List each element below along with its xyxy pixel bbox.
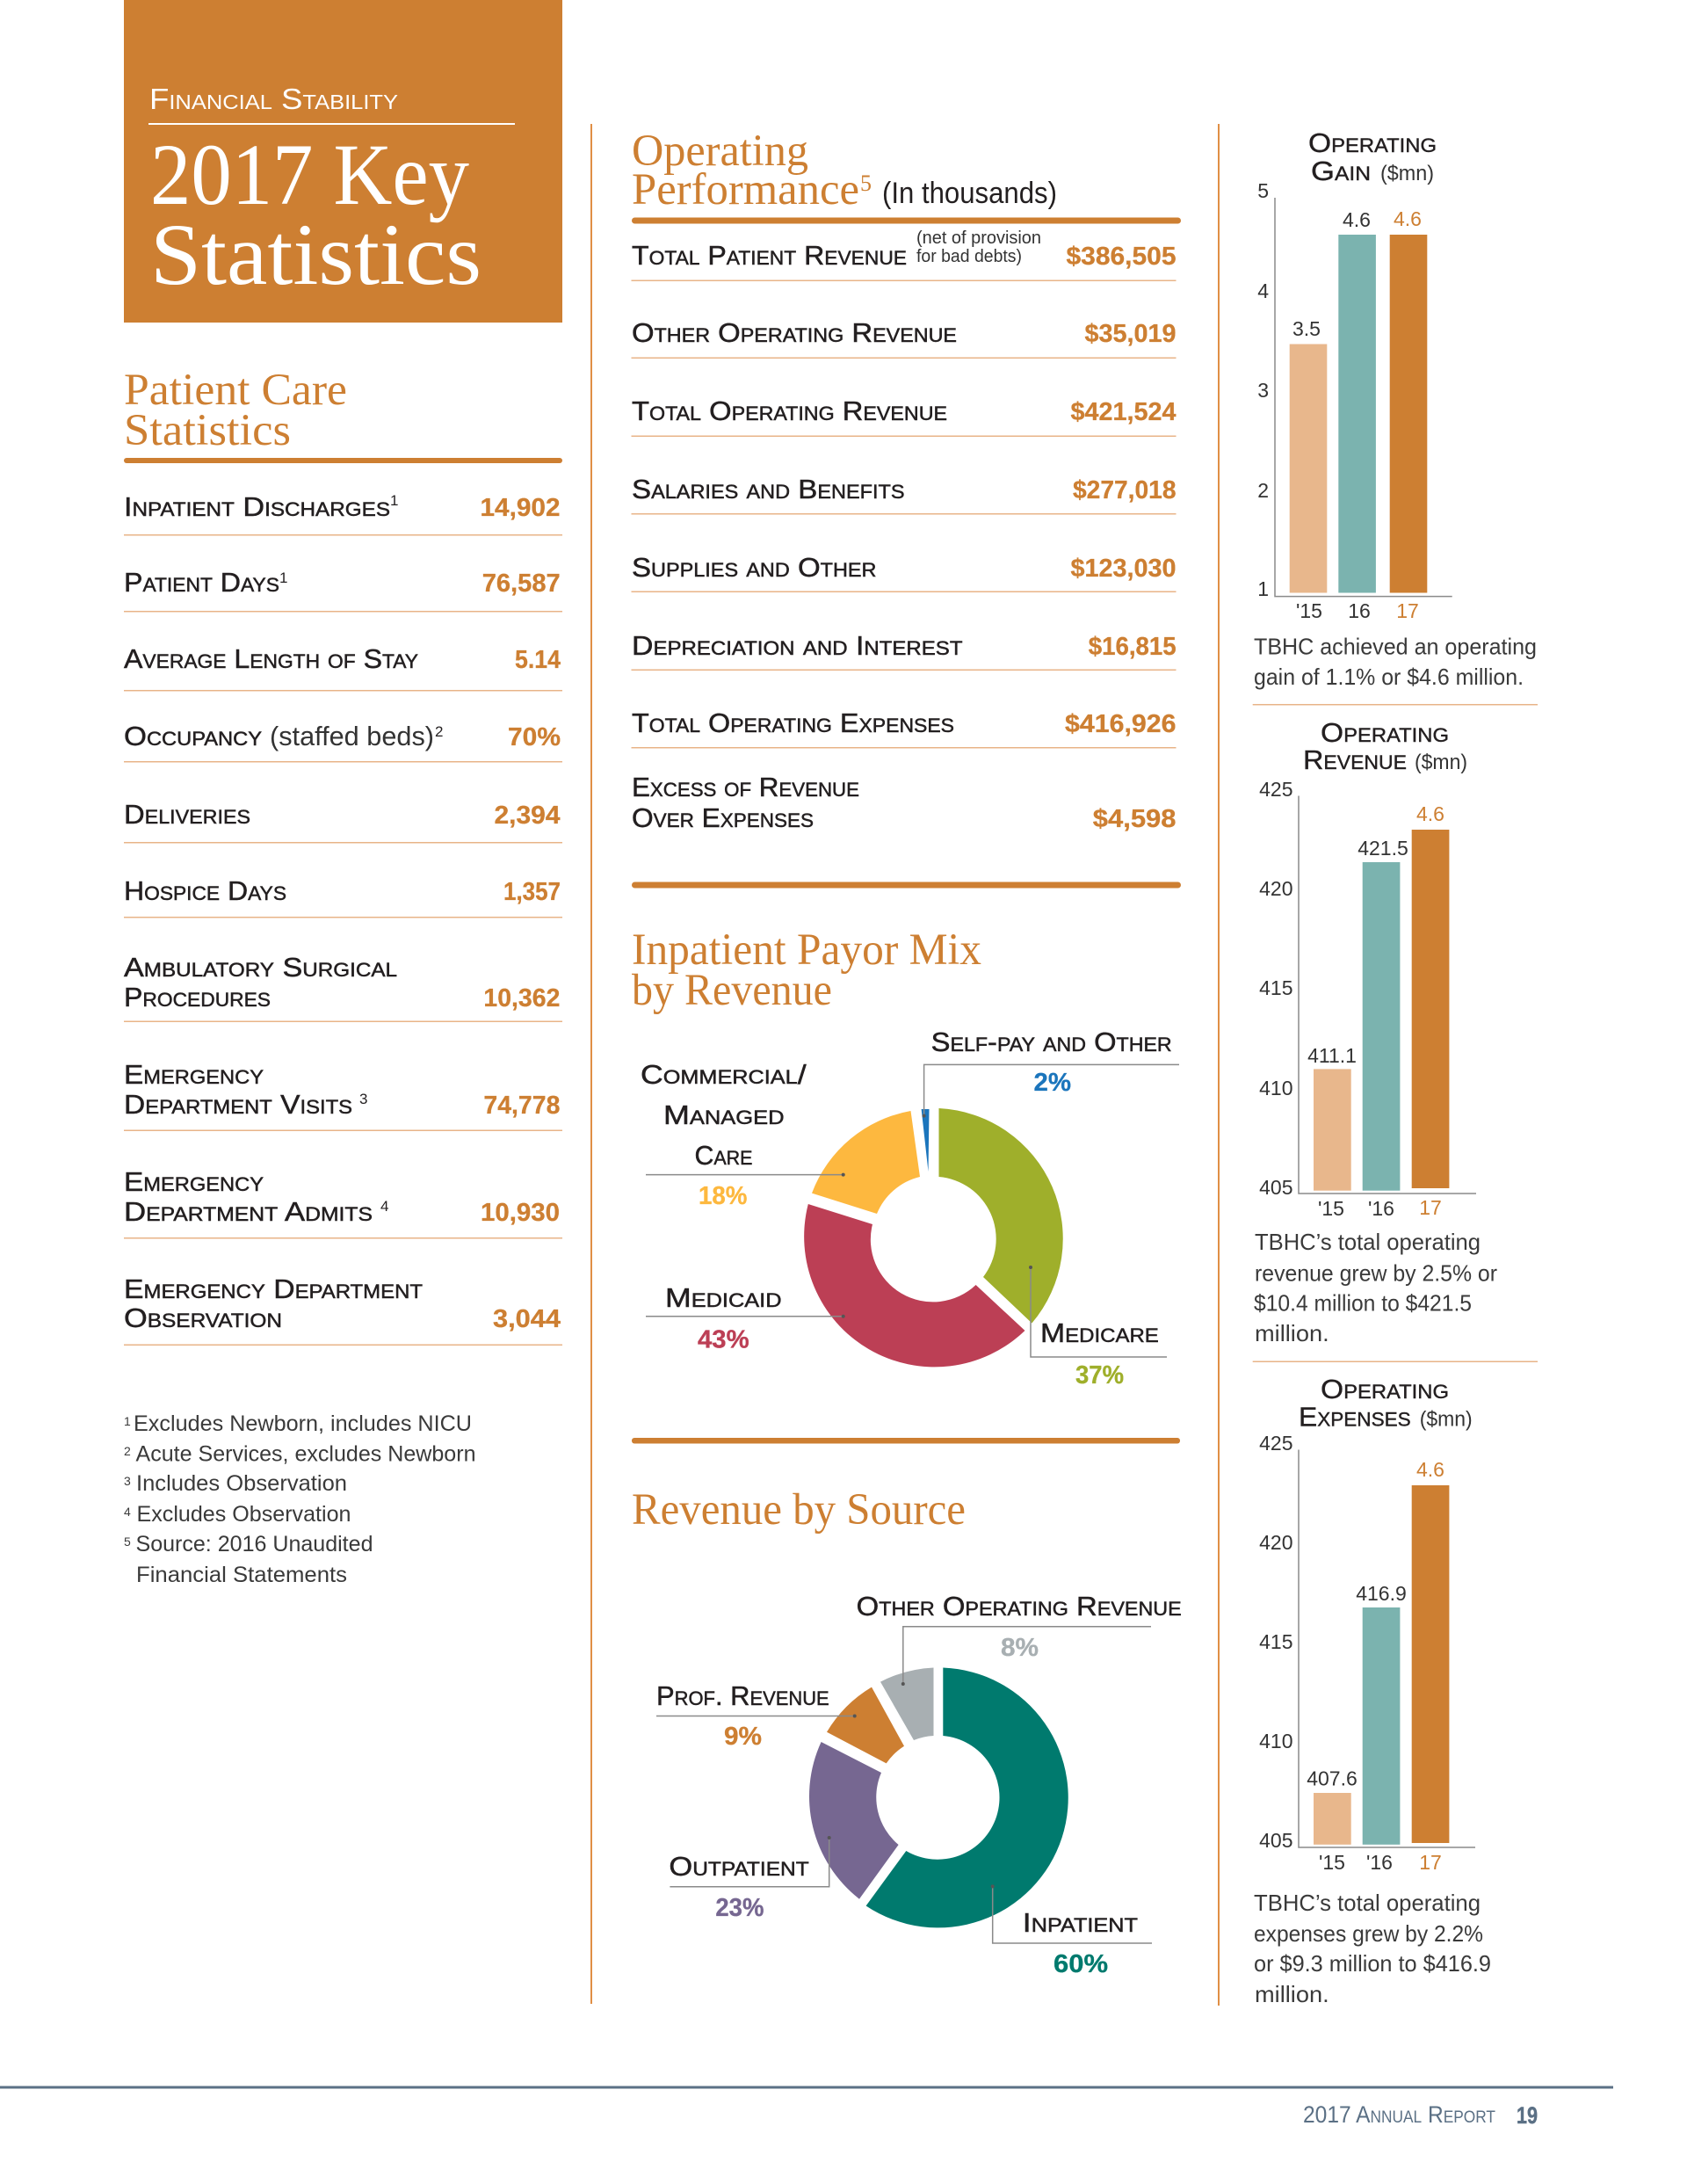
bar chart: Operating Expenses: 420 (1259, 1531, 1293, 1554)
callout: Prof. Revenue: Prof. Revenue (656, 1680, 829, 1711)
panel: Operating Revenue chart (1253, 717, 1538, 1362)
row: Ambulatory Surgical Procedures: 10,362 (483, 984, 560, 1012)
bar chart: Operating Revenue: 411.1 (1307, 1044, 1357, 1067)
chart title: Operating Revenue: Operating (1321, 717, 1449, 748)
panel: Patient Care Statistics (124, 366, 562, 1587)
bar chart: Operating Gain: 3 (1257, 379, 1269, 402)
heading: Inpatient Payor Mix (632, 925, 981, 1015)
row: Hospice Days: 1,357 (503, 878, 561, 906)
row: Emergency Department Observation: Emergency Department (124, 1273, 423, 1304)
callout: Medicare: 37% (1075, 1361, 1124, 1389)
row: Inpatient Discharges (124, 491, 562, 536)
caption: operating expenses: or $9.3 million to $416.9 (1254, 1950, 1491, 1977)
row: Emergency Department Visits: Emergency (124, 1059, 264, 1090)
bar chart: Operating Gain: 4.6 (1343, 208, 1371, 231)
bar chart: Operating Gain: 3.5 (1292, 317, 1321, 340)
footnotes: Financial Statements (136, 1563, 347, 1587)
row: Total Patient Revenue: (net of provision (916, 229, 1041, 248)
chart title: Operating Revenue: Revenue (1303, 744, 1407, 775)
footnotes: 1 (124, 1414, 131, 1428)
callout: Other Operating Revenue: 8% (1001, 1634, 1039, 1662)
row: Total Operating Expenses: $416,926 (1065, 710, 1176, 738)
eyebrow: Financial Stability: Financial Stability (149, 83, 398, 115)
bar chart: Operating Gain (1257, 179, 1452, 622)
heading: Operating Performance: 5 (860, 171, 872, 196)
donut chart: revenue sources (809, 1668, 1068, 1927)
callout: Outpatient (669, 1836, 831, 1922)
row: Other Operating Revenue (631, 317, 1176, 359)
callout: Prof. Revenue (656, 1680, 857, 1751)
row: Occupancy: (staffed beds) (270, 721, 434, 751)
row: Average Length of Stay (124, 643, 562, 691)
donut chart: payor mix (804, 1108, 1063, 1367)
row: Supplies and Other: $123,030 (1070, 555, 1176, 583)
main title: Statistics (150, 206, 481, 303)
bar chart: Operating Revenue: 410 (1259, 1077, 1293, 1099)
title panel: 2017 Key Statistics (124, 0, 562, 323)
row: Patient Days: Patient Days (124, 567, 279, 598)
footer: annual report and page number: 19 (1517, 2102, 1538, 2129)
row: Ambulatory Surgical Procedures: Ambulatory Surgical (124, 952, 397, 983)
callout: Medicaid: 43% (698, 1326, 749, 1354)
callout: Self-pay and Other (923, 1027, 1179, 1118)
row: Emergency Department Observation: Observation (124, 1302, 282, 1333)
callout: Commercial / Managed Care: Care (694, 1140, 752, 1171)
bar chart: Operating Revenue: '16 (1368, 1197, 1394, 1220)
row: Occupancy: 70% (508, 723, 561, 751)
callout: Medicaid: Medicaid (665, 1282, 782, 1313)
footnotes: Source: 2016 Unaudited (135, 1532, 373, 1556)
caption: operating gain: gain of 1.1% or $4.6 million. (1254, 664, 1524, 690)
row: Salaries and Benefits: Salaries and Benefits (632, 474, 905, 504)
row: Total Patient Revenue: for bad debts) (916, 247, 1022, 266)
panel: Operating Performance (631, 127, 1181, 888)
footnotes: 2 (124, 1444, 131, 1458)
panel: Inpatient Payor Mix by Revenue (632, 925, 1180, 1443)
footnotes: 3 (124, 1474, 131, 1488)
row: Occupancy: 2 (435, 723, 443, 740)
chart title: Operating Expenses: ($mn) (1420, 1408, 1473, 1432)
bar chart: Operating Expenses (1259, 1432, 1475, 1874)
chart title: Operating Expenses (1299, 1374, 1473, 1433)
chart title: Operating Gain: Operating (1308, 127, 1437, 158)
bar chart: Operating Expenses: 405 (1259, 1829, 1293, 1852)
row: Average Length of Stay: 5.14 (515, 646, 561, 674)
chart title: Operating Gain: Gain (1311, 156, 1371, 186)
callout: Medicare (1029, 1266, 1167, 1389)
bar chart: Operating Expenses: '16 (1366, 1851, 1393, 1874)
bar chart: Operating Gain: 17 (1396, 599, 1419, 622)
caption: operating gain (1254, 633, 1537, 690)
row: Excess of Revenue Over Expenses (632, 772, 1176, 833)
row: Emergency Department Visits (124, 1059, 562, 1131)
row: Average Length of Stay: Average Length of Stay (124, 643, 418, 674)
row: Emergency Department Visits: Department Visits (124, 1089, 352, 1120)
main title (150, 126, 481, 303)
row: Inpatient Discharges: Inpatient Discharges (124, 491, 390, 522)
chart title: Operating Revenue: ($mn) (1415, 751, 1467, 774)
row: Emergency Department Admits: 4 (380, 1198, 388, 1215)
callout: Commercial / Managed Care (641, 1059, 845, 1210)
callout: Prof. Revenue: 9% (724, 1723, 762, 1751)
panel: Operating Expenses chart (1254, 1374, 1491, 2007)
row: Emergency Department Observation (124, 1273, 562, 1346)
callout: Outpatient: Outpatient (669, 1851, 809, 1882)
callout: Other Operating Revenue (857, 1591, 1182, 1686)
row: Occupancy: Occupancy (124, 721, 262, 751)
row: Salaries and Benefits (631, 474, 1176, 515)
bar chart: Operating Revenue: 405 (1259, 1176, 1293, 1199)
callout: Self-pay and Other: Self-pay and Other (931, 1027, 1172, 1057)
row: Other Operating Revenue: $35,019 (1084, 320, 1176, 348)
caption: operating revenue: TBHC’s total operating (1255, 1229, 1481, 1255)
bar chart: Operating Revenue: 420 (1259, 877, 1293, 900)
caption: operating gain: TBHC achieved an operating (1254, 633, 1537, 659)
bar chart: Operating Expenses: 425 (1259, 1432, 1293, 1455)
caption: operating revenue: million. (1255, 1320, 1329, 1346)
row: Ambulatory Surgical Procedures (124, 952, 562, 1022)
chart title: Operating Gain: ($mn) (1380, 162, 1434, 185)
row: Total Patient Revenue: Total Patient Revenue (632, 240, 907, 271)
footnotes: 5 (124, 1535, 131, 1549)
row: Patient Days (124, 567, 562, 612)
row: Supplies and Other: Supplies and Other (632, 552, 877, 583)
callout: Commercial / Managed Care: 18% (699, 1182, 748, 1210)
caption: operating expenses: expenses grew by 2.2% (1254, 1920, 1483, 1947)
callout: Commercial / Managed Care: Managed (663, 1099, 784, 1130)
bar chart: Operating Revenue: 421.5 (1358, 837, 1408, 860)
bar chart: Operating Expenses: '15 (1319, 1851, 1345, 1874)
caption: operating revenue: $10.4 million to $421.5 (1254, 1290, 1472, 1317)
row: Hospice Days (124, 875, 562, 918)
row: Ambulatory Surgical Procedures: Procedures (124, 982, 271, 1012)
row: Total Operating Revenue: Total Operating Revenue (632, 395, 947, 426)
row: Hospice Days: Hospice Days (124, 875, 286, 906)
callout: Self-pay and Other: 2% (1033, 1069, 1071, 1097)
panel: Operating Gain chart (1253, 127, 1538, 705)
row: Total Operating Revenue: $421,524 (1070, 398, 1176, 426)
heading: Patient Care Statistics (124, 366, 562, 463)
callout: Inpatient: 60% (1053, 1950, 1108, 1978)
row: Emergency Department Visits: 3 (359, 1091, 367, 1107)
callout: Other Operating Revenue: Other Operating Revenue (857, 1591, 1182, 1622)
bar chart: Operating Gain: '15 (1296, 599, 1322, 622)
bar chart: Operating Gain: 4 (1257, 279, 1269, 302)
bar chart: Operating Gain: 1 (1257, 577, 1269, 600)
footer: annual report and page number: 2017 Annual Report (1303, 2101, 1495, 2128)
bar chart: Operating Revenue (1259, 778, 1476, 1220)
row: Total Operating Revenue (631, 395, 1176, 437)
callout: Commercial / Managed Care: Commercial/ (641, 1059, 807, 1090)
row: Excess of Revenue Over Expenses: Excess of Revenue (632, 772, 859, 802)
heading: Revenue by Source: Revenue by Source (632, 1485, 966, 1535)
heading: Inpatient Payor Mix: Inpatient Payor Mix (632, 925, 981, 975)
row: Emergency Department Admits: Department Admits (124, 1196, 373, 1227)
bar chart: Operating Gain: 4.6 (1394, 207, 1422, 230)
chart title: Operating Expenses: Expenses (1299, 1402, 1411, 1433)
row: Total Patient Revenue (631, 229, 1176, 281)
bar chart: Operating Revenue: '15 (1318, 1197, 1344, 1220)
footnotes (124, 1411, 476, 1587)
footnotes: Excludes Newborn, includes NICU (134, 1411, 472, 1436)
row: Excess of Revenue Over Expenses: Over Expenses (632, 802, 814, 833)
heading: Patient Care Statistics: Patient Care (124, 366, 347, 415)
row: Emergency Department Admits (124, 1166, 562, 1239)
footer: annual report and page number (0, 2086, 1613, 2129)
row: Patient Days: 1 (279, 570, 287, 586)
bar chart: Operating Revenue: 425 (1259, 778, 1293, 801)
bar chart: Operating Gain: 16 (1348, 599, 1371, 622)
chart title: Operating Expenses: Operating (1321, 1374, 1449, 1404)
caption: operating revenue (1254, 1229, 1497, 1346)
caption: operating expenses: million. (1255, 1981, 1329, 2007)
row: Emergency Department Visits: 74,778 (483, 1092, 560, 1120)
callout: Outpatient: 23% (715, 1894, 764, 1922)
row: Emergency Department Admits: Emergency (124, 1166, 264, 1197)
row: Inpatient Discharges: 14,902 (480, 494, 561, 522)
panel: Revenue by Source (632, 1485, 1182, 1978)
bar chart: Operating Expenses: 415 (1259, 1630, 1293, 1653)
bar chart: Operating Expenses: 17 (1419, 1851, 1442, 1874)
caption: operating expenses (1254, 1890, 1491, 2007)
heading: Operating Performance (632, 127, 1181, 223)
bar chart: Operating Revenue: 17 (1419, 1196, 1442, 1219)
bar chart: Operating Expenses: 407.6 (1307, 1767, 1358, 1790)
caption: operating revenue: revenue grew by 2.5% or (1255, 1260, 1497, 1287)
footnotes: 4 (124, 1505, 131, 1519)
heading: Inpatient Payor Mix: by Revenue (632, 966, 832, 1015)
row: Deliveries (124, 799, 562, 844)
bar chart: Operating Expenses: 410 (1259, 1730, 1293, 1752)
chart title: Operating Gain (1308, 127, 1437, 186)
callout: Inpatient (991, 1884, 1152, 1978)
bar chart: Operating Revenue: 415 (1259, 976, 1293, 999)
heading: Operating Performance: Operating (632, 127, 808, 176)
main title: 2017 Key (150, 126, 469, 223)
callout: Medicare: Medicare (1040, 1317, 1159, 1348)
row: Supplies and Other (631, 552, 1176, 592)
row: Other Operating Revenue: Other Operating Revenue (632, 317, 957, 348)
row: Total Operating Expenses (631, 707, 1176, 749)
footnotes: Includes Observation (136, 1471, 347, 1496)
row: Salaries and Benefits: $277,018 (1073, 476, 1176, 504)
bar chart: Operating Revenue: 4.6 (1416, 802, 1444, 825)
footnotes: Excludes Observation (137, 1502, 351, 1527)
chart title: Operating Revenue (1303, 717, 1467, 775)
callout: Medicaid (646, 1282, 845, 1354)
row: Total Operating Expenses: Total Operating Expenses (632, 707, 954, 738)
heading: Patient Care Statistics: Statistics (124, 406, 291, 455)
row: Total Patient Revenue: $386,505 (1067, 243, 1176, 271)
heading: Operating Performance: Performance (632, 165, 859, 214)
row: Inpatient Discharges: 1 (390, 492, 398, 509)
row: Depreciation and Interest (631, 630, 1177, 671)
row: Deliveries: 2,394 (494, 802, 561, 830)
row: Emergency Department Admits: 10,930 (481, 1199, 560, 1227)
row: Depreciation and Interest: Depreciation and Interest (632, 630, 963, 661)
footnotes: Acute Services, excludes Newborn (135, 1441, 476, 1466)
caption: operating expenses: TBHC’s total operating (1254, 1890, 1481, 1916)
bar chart: Operating Gain: 2 (1257, 479, 1269, 502)
row: Emergency Department Observation: 3,044 (493, 1305, 561, 1333)
row: Patient Days: 76,587 (482, 570, 561, 598)
row: Deliveries: Deliveries (124, 799, 250, 830)
row: Depreciation and Interest: $16,815 (1089, 633, 1177, 661)
row: Occupancy (124, 721, 562, 763)
row: Excess of Revenue Over Expenses: $4,598 (1093, 805, 1176, 833)
bar chart: Operating Expenses: 416.9 (1356, 1582, 1407, 1605)
heading: Operating Performance: (In thousands) (882, 177, 1057, 210)
bar chart: Operating Expenses: 4.6 (1416, 1458, 1444, 1481)
bar chart: Operating Gain: 5 (1257, 179, 1269, 202)
callout: Inpatient: Inpatient (1023, 1907, 1138, 1938)
